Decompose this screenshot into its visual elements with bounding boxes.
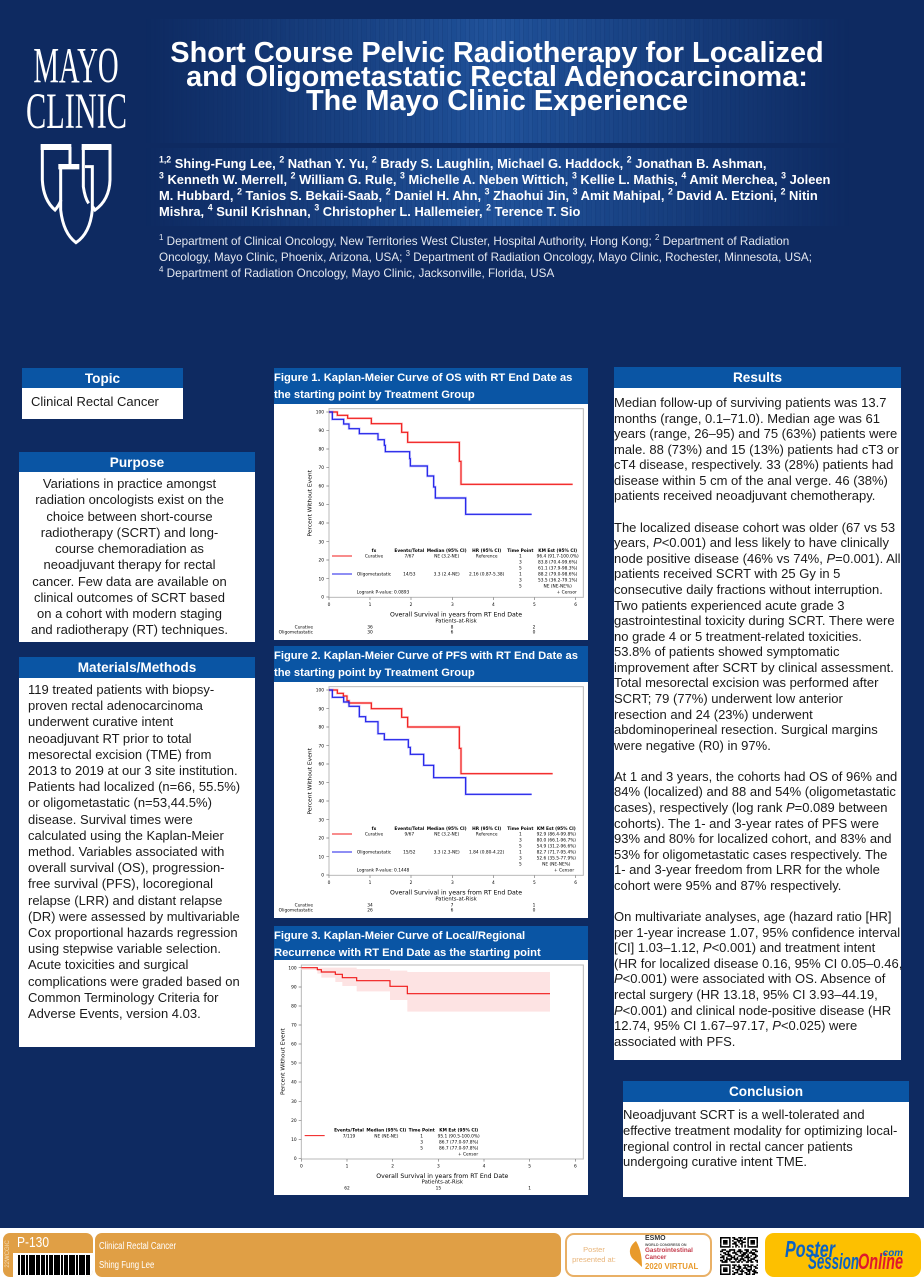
chart: figure 1 overall survival: 61.1 (37.9-98.3%) bbox=[538, 566, 578, 572]
chart: figure 2 progression-free survival: KM Est (95% CI) bbox=[537, 826, 576, 832]
author background band bbox=[198, 148, 793, 226]
chart: figure 2 progression-free survival: 40 bbox=[318, 799, 324, 805]
chart: figure 3 local regional recurrence: 95.1 (90.5-100.0%) bbox=[438, 1133, 480, 1139]
chart: figure 1 overall survival: Overall Survival in years from RT End Date bbox=[390, 612, 522, 619]
panel: materials and methods: Patients had localized (n=66, 55.5%) bbox=[28, 779, 240, 794]
panel: materials and methods: using stepwise variable selection. bbox=[28, 941, 221, 956]
chart: figure 2 progression-free survival: 82.7 (71.7-95.4%) bbox=[537, 850, 576, 856]
chart: figure 2 progression-free survival: 60 bbox=[318, 762, 324, 768]
chart: figure 2 progression-free survival: 100 bbox=[316, 688, 324, 694]
poster number and barcode: P-130 bbox=[17, 1234, 49, 1251]
panel: results: 84% (localized) and 88 and 54% (oligometastatic bbox=[614, 784, 896, 799]
panel: materials and methods: proven rectal adenocarcinoma bbox=[28, 698, 203, 713]
panel: materials and methods bbox=[19, 657, 255, 1047]
chart: figure 3 local regional recurrence: 86.7 (77.0-97.8%) bbox=[439, 1140, 479, 1146]
chart: figure 1 overall survival: Curative bbox=[365, 554, 383, 560]
chart: figure 1 overall survival: 1 bbox=[369, 602, 372, 608]
chart: figure 1 overall survival: 96.4 (91.7-100.0%) bbox=[537, 554, 579, 560]
affiliations: Oncology, Mayo Clinic, Phoenix, Arizona, USA; 3 Department of Radiation Oncology, Mayo Clinic, Rochester, Minnesota, USA; bbox=[159, 249, 812, 264]
panel: materials and methods: Adverse Events, version 4.03. bbox=[28, 1006, 201, 1021]
affiliations: 4 Department of Radiation Oncology, Mayo Clinic, Jacksonville, Florida, USA bbox=[159, 265, 554, 280]
panel: results: Results bbox=[733, 370, 782, 385]
chart: figure 1 overall survival: KM Est (95% CI) bbox=[538, 548, 577, 554]
chart: figure 3 local regional recurrence: 10 bbox=[291, 1137, 297, 1143]
panel: topic: Topic bbox=[85, 371, 120, 386]
header background band bbox=[198, 19, 793, 143]
chart: figure 1 overall survival: 6 bbox=[574, 602, 577, 608]
panel: results: 93% and 80% for localized cohort, and 83% and bbox=[614, 831, 892, 846]
chart: figure 3 local regional recurrence: 1 bbox=[528, 1186, 531, 1192]
chart: figure 2 progression-free survival: 7 bbox=[451, 902, 454, 908]
chart: figure 2 progression-free survival: 0 bbox=[533, 908, 536, 914]
panel: results: patients received neoadjuvant chemotherapy. bbox=[614, 488, 875, 503]
logo: PosterSessionOnline: Poster bbox=[785, 1236, 836, 1262]
chart: figure 2 progression-free survival: Median (95% CI) bbox=[427, 826, 467, 832]
panel: results: consecutive daily fractions without interruption. bbox=[614, 582, 883, 597]
authors: 3 Kenneth W. Merrell, 2 William G. Rule, 3 Michelle A. Neben Wittich, 3 Kellie L. Mathis, 4 Amit Merchea, 3 Joleen bbox=[159, 171, 830, 187]
session and author strip: Shing Fung Lee bbox=[99, 1260, 154, 1271]
chart: figure 1 overall survival: Logrank P-value: 0.0893 bbox=[357, 590, 409, 596]
chart: figure 1 overall survival: 80 bbox=[318, 447, 324, 453]
chart: figure 1 overall survival: 20 bbox=[318, 558, 324, 564]
chart: figure 2 progression-free survival: 30 bbox=[318, 817, 324, 823]
chart: figure 1 overall survival: 2 bbox=[410, 602, 413, 608]
chart: figure 1 overall survival: 3 bbox=[519, 578, 522, 584]
panel: results: P<0.001) were associated with OS. Absence of bbox=[614, 971, 885, 986]
chart: figure 3 local regional recurrence: 4 bbox=[483, 1164, 486, 1170]
chart: figure 2 progression-free survival: 4 bbox=[492, 880, 495, 886]
panel: results: years, P<0.001) and less likely to have clinically bbox=[614, 535, 889, 550]
chart: figure 1 overall survival: 3.3 (2.4-NE) bbox=[434, 572, 460, 578]
panel: results: cT4 disease, respectively. 33 (28%) patients had bbox=[614, 457, 893, 472]
chart: figure 3 local regional recurrence: 6 bbox=[574, 1164, 577, 1170]
panel: results: rectal surgery (HR 13.18, 95% CI 3.93–44.19, bbox=[614, 987, 878, 1002]
panel: materials and methods: neoadjuvant RT prior to total bbox=[28, 731, 192, 746]
figure 1 heading: Figure 1. Kaplan-Meier Curve of OS with RT End Date as bbox=[274, 372, 572, 384]
chart: figure 2 progression-free survival: Reference bbox=[476, 832, 498, 838]
panel: results: 1- and 3-year freedom from LRR for the whole bbox=[614, 862, 880, 877]
panel: materials and methods: method. Variables associated with bbox=[28, 844, 224, 859]
chart: figure 1 overall survival: 1 bbox=[519, 572, 522, 578]
logo: PosterSessionOnline bbox=[765, 1233, 921, 1277]
chart: figure 3 local regional recurrence: 60 bbox=[291, 1042, 297, 1048]
figure 3 heading: Figure 3. Kaplan-Meier Curve of Local/Regional bbox=[274, 930, 525, 942]
chart: figure 2 progression-free survival: Curative bbox=[365, 832, 383, 838]
authors: 1,2 Shing-Fung Lee, 2 Nathan Y. Yu, 2 Brady S. Laughlin, Michael G. Haddock, 2 Jonathan B. Ashman, bbox=[159, 155, 767, 171]
affiliations bbox=[159, 233, 812, 280]
chart: figure 3 local regional recurrence: Time Point bbox=[409, 1128, 435, 1134]
panel: results: The localized disease cohort was older (67 vs 53 bbox=[614, 520, 895, 535]
chart: figure 1 overall survival: Oligometastatic bbox=[357, 572, 392, 578]
chart: figure 2 progression-free survival: fx bbox=[372, 826, 377, 832]
chart: figure 2 progression-free survival: 90 bbox=[318, 706, 324, 712]
chart: figure 3 local regional recurrence: 100 bbox=[288, 965, 297, 971]
chart: figure 2 progression-free survival: 20 bbox=[318, 836, 324, 842]
panel: purpose: Variations in practice amongst bbox=[43, 476, 216, 491]
authors: Mishra, 4 Sunil Krishnan, 3 Christopher L. Hallemeier, 2 Terence T. Sio bbox=[159, 203, 580, 219]
chart: figure 2 progression-free survival: 52.6 (35.5-77.9%) bbox=[537, 856, 576, 862]
chart: figure 3 local regional recurrence: Overall Survival in years from RT End Date bbox=[376, 1173, 509, 1180]
congress badge: ESMO bbox=[645, 1235, 666, 1242]
panel: materials and methods: (DR) were assessed by multivariable bbox=[28, 909, 240, 924]
chart: figure 1 overall survival: 8 bbox=[451, 624, 454, 630]
panel: results: cohorts). The 1- and 3-year rates of PFS were bbox=[614, 816, 879, 831]
chart: figure 1 overall survival: fx bbox=[372, 548, 377, 554]
panel: results: Total mesorectal excision was performed after bbox=[614, 675, 878, 690]
figure 3 heading bbox=[274, 926, 588, 960]
chart: figure 1 overall survival: 60 bbox=[318, 484, 324, 490]
chart: figure 2 progression-free survival: 0 bbox=[321, 873, 324, 879]
panel: conclusion: Conclusion bbox=[729, 1084, 803, 1099]
poster number and barcode: 22WCGIC bbox=[5, 1240, 11, 1268]
chart: figure 2 progression-free survival: Patients-at-Risk bbox=[435, 896, 478, 902]
chart: figure 1 overall survival: Reference bbox=[476, 554, 498, 560]
chart: figure 2 progression-free survival: 1 bbox=[533, 902, 536, 908]
logo: Mayo Clinic bbox=[26, 38, 127, 244]
chart: figure 3 local regional recurrence: 0 bbox=[300, 1164, 303, 1170]
chart: figure 1 overall survival bbox=[278, 408, 584, 636]
figure 1 heading: the starting point by Treatment Group bbox=[274, 389, 475, 401]
chart: figure 1 overall survival: 5 bbox=[519, 566, 522, 572]
chart: figure 3 local regional recurrence: 5 bbox=[528, 1164, 531, 1170]
chart: figure 2 progression-free survival: Events/Total bbox=[394, 826, 425, 832]
panel: results: node positive disease (46% vs 74%, P=0.001). All bbox=[614, 551, 901, 566]
congress badge: Poster bbox=[583, 1245, 605, 1254]
panel: results: [CI] 1.03–1.12, P<0.001) and treatment intent bbox=[614, 940, 875, 955]
chart: figure 3 local regional recurrence: 30 bbox=[291, 1099, 297, 1105]
figure 3 heading: Recurrence with RT End Date as the starting point bbox=[274, 947, 541, 959]
panel: conclusion: undergoing curative intent TME. bbox=[623, 1154, 807, 1169]
panel: results: months (range, 0.1–71.0). Median age was 61 bbox=[614, 411, 880, 426]
panel: materials and methods: Cox proportional hazards regression bbox=[28, 925, 238, 940]
panel: materials and methods: Acute toxicities and surgical bbox=[28, 957, 188, 972]
panel: conclusion: Neoadjuvant SCRT is a well-tolerated and bbox=[623, 1107, 865, 1122]
panel: materials and methods: Materials/Methods bbox=[78, 660, 196, 675]
chart: figure 1 overall survival: Percent Without Event bbox=[308, 470, 314, 537]
figure 2 heading: Figure 2. Kaplan-Meier Curve of PFS with RT End Date as bbox=[274, 650, 578, 662]
chart: figure 1 overall survival: Patients-at-Risk bbox=[435, 618, 478, 624]
chart: figure 2 progression-free survival: Oligometastatic bbox=[279, 908, 314, 914]
chart: figure 2 progression-free survival: 6 bbox=[574, 880, 577, 886]
panel: results: abdominoperineal resection. Surgical margins bbox=[614, 722, 878, 737]
chart: figure 1 overall survival: 36 bbox=[367, 624, 373, 630]
congress badge: presented at: bbox=[572, 1254, 616, 1264]
panel: materials and methods: 2013 to 2019 at our 3 site institution. bbox=[28, 763, 238, 778]
panel: results: cohort were 95% and 87% respectively. bbox=[614, 878, 841, 893]
chart: figure 1 overall survival: 2.16 (0.87-5.38) bbox=[469, 572, 505, 578]
congress badge: Cancer bbox=[645, 1254, 666, 1260]
chart: figure 1 overall survival: NE (3.2-NE) bbox=[434, 554, 460, 560]
panel: purpose: Purpose bbox=[110, 455, 164, 470]
chart: figure 1 overall survival: 6 bbox=[451, 630, 454, 636]
panel: materials and methods: disease. Survival times were bbox=[28, 812, 193, 827]
chart: figure 1 overall survival: 70 bbox=[318, 465, 324, 471]
panel: materials and methods: complications were graded based on bbox=[28, 974, 240, 989]
chart: figure 2 progression-free survival: Oligometastatic bbox=[357, 850, 392, 856]
chart: figure 3 local regional recurrence: + Censor bbox=[458, 1152, 478, 1158]
chart: figure 1 overall survival: 5 bbox=[519, 584, 522, 590]
chart: figure 2 progression-free survival: 10 bbox=[318, 854, 324, 860]
panel: purpose: choice between short-course bbox=[46, 508, 213, 524]
chart: figure 2 progression-free survival: Percent Without Event bbox=[308, 748, 314, 815]
chart: figure 3 local regional recurrence: 62 bbox=[344, 1186, 350, 1192]
panel: materials and methods: Common Terminology Criteria for bbox=[28, 990, 218, 1005]
chart: figure 2 progression-free survival: 9/67 bbox=[404, 832, 414, 838]
panel: purpose: course chemoradiation as bbox=[55, 541, 204, 556]
panel: results: P<0.001) and clinical node-positive disease (HR bbox=[614, 1003, 891, 1018]
chart: figure 1 overall survival: 90 bbox=[318, 428, 324, 434]
chart: figure 3 local regional recurrence: 3 bbox=[437, 1164, 440, 1170]
chart: figure 1 overall survival: 3 bbox=[451, 602, 454, 608]
panel: materials and methods: underwent curative intent bbox=[28, 714, 173, 729]
title: The Mayo Clinic Experience bbox=[306, 85, 688, 117]
chart: figure 3 local regional recurrence: 2 bbox=[391, 1164, 394, 1170]
chart: figure 1 overall survival: 88.2 (79.0-98.6%) bbox=[538, 572, 578, 578]
chart: figure 2 progression-free survival: 3.3 (2.3-NE) bbox=[434, 850, 460, 856]
chart: figure 1 overall survival: 10 bbox=[318, 576, 324, 582]
chart: figure 1 overall survival: 100 bbox=[316, 410, 324, 416]
figure 2 heading: the starting point by Treatment Group bbox=[274, 667, 475, 679]
chart: figure 2 progression-free survival: Overall Survival in years from RT End Date bbox=[390, 890, 522, 897]
panel: conclusion: effective treatment modality for optimizing local- bbox=[623, 1123, 897, 1138]
chart: figure 2 progression-free survival: 1 bbox=[519, 850, 522, 856]
panel: results: years (range, 26–95) and 75 (63%) patients were bbox=[614, 426, 897, 441]
panel: results: disease within 5 cm of the anal verge. 46 (38%) bbox=[614, 473, 888, 488]
chart: figure 2 progression-free survival: 26 bbox=[367, 908, 373, 914]
panel: materials and methods: 119 treated patients with biopsy- bbox=[28, 682, 214, 697]
chart: figure 1 overall survival: 5 bbox=[533, 602, 536, 608]
chart: figure 1 overall survival: NE (NE-NE%) bbox=[543, 584, 572, 590]
panel: purpose: clinical outcomes of SCRT based bbox=[34, 590, 225, 605]
chart: figure 2 progression-free survival: Logrank P-value: 0.1448 bbox=[357, 868, 409, 874]
chart: figure 2 progression-free survival: HR (95% CI) bbox=[472, 826, 501, 832]
chart: figure 2 progression-free survival: 92.9 (86.4-99.8%) bbox=[537, 832, 576, 838]
chart: figure 3 local regional recurrence: 0 bbox=[294, 1156, 297, 1162]
panel: results: 53% for oligometastatic cases respectively. The bbox=[614, 847, 887, 862]
chart: figure 2 progression-free survival: 54.9 (31.2-96.6%) bbox=[537, 844, 576, 850]
panel: topic bbox=[22, 368, 183, 419]
chart: figure 1 overall survival: 30 bbox=[367, 630, 373, 636]
panel: results: no grade 4 or 5 treatment-related toxicities. bbox=[614, 629, 862, 644]
chart: figure 1 overall survival: 3 bbox=[519, 560, 522, 566]
chart: figure 3 local regional recurrence: 5 bbox=[420, 1146, 423, 1152]
chart: figure 1 overall survival: 2 bbox=[533, 624, 536, 630]
affiliations: 1 Department of Clinical Oncology, New Territories West Cluster, Hospital Authority, Hong Kong; 2 Department of Radiation bbox=[159, 233, 789, 248]
congress badge: Gastrointestinal bbox=[645, 1247, 693, 1254]
panel: results: resection and 24 (23%) underwent bbox=[614, 707, 813, 722]
panel: materials and methods: or oligometastatic (n=53,44.5%) bbox=[28, 795, 212, 810]
panel: materials and methods: relapse (LRR) and distant relapse bbox=[28, 893, 222, 908]
chart: figure 3 local regional recurrence: NE (NE-NE) bbox=[374, 1133, 399, 1139]
icon: wheat bbox=[630, 1241, 642, 1267]
chart: figure 2 progression-free survival: 5 bbox=[519, 862, 522, 868]
chart: figure 1 overall survival: 53.5 (36.2-79.1%) bbox=[538, 578, 578, 584]
chart: figure 2 progression-free survival: 3 bbox=[451, 880, 454, 886]
poster number and barcode bbox=[3, 1233, 93, 1277]
panel: purpose: radiotherapy (SCRT) and long- bbox=[41, 525, 218, 540]
chart: figure 3 local regional recurrence: 40 bbox=[291, 1080, 297, 1086]
footer bar bbox=[0, 1228, 924, 1280]
chart: figure 3 local regional recurrence: 7/119 bbox=[343, 1133, 355, 1139]
chart: figure 2 progression-free survival: + Censor bbox=[554, 868, 574, 874]
panel: purpose: and radiotherapy (RT) techniques. bbox=[31, 622, 228, 637]
congress badge bbox=[565, 1233, 712, 1277]
chart: figure 2 progression-free survival: 3 bbox=[519, 838, 522, 844]
chart: figure 1 overall survival: + Censor bbox=[557, 590, 577, 596]
chart: figure 1 overall survival: 30 bbox=[318, 539, 324, 545]
chart: figure 1 overall survival: Curative bbox=[295, 624, 313, 630]
chart: figure 2 progression-free survival: Curative bbox=[295, 902, 313, 908]
chart: figure 2 progression-free survival: 5 bbox=[533, 880, 536, 886]
chart: figure 1 overall survival: 0 bbox=[328, 602, 331, 608]
chart: figure 2 progression-free survival: NE (NE-NE%) bbox=[542, 862, 571, 868]
chart: figure 3 local regional recurrence bbox=[280, 964, 584, 1192]
chart: figure 2 progression-free survival: 80 bbox=[318, 725, 324, 731]
chart: figure 2 progression-free survival: 15/52 bbox=[403, 850, 416, 856]
chart: figure 3 local regional recurrence: 20 bbox=[291, 1118, 297, 1124]
chart: figure 3 local regional recurrence: 3 bbox=[420, 1140, 423, 1146]
panel: results: Median follow-up of surviving patients was 13.7 bbox=[614, 395, 886, 410]
panel: materials and methods: free survival (PFS), locoregional bbox=[28, 876, 213, 891]
congress badge: 2020 VIRTUAL bbox=[645, 1262, 698, 1271]
panel: results: Two patients experienced acute grade 3 bbox=[614, 598, 845, 613]
chart: figure 1 overall survival: 50 bbox=[318, 502, 324, 508]
panel: conclusion bbox=[623, 1081, 909, 1197]
chart: figure 2 progression-free survival: Time Point bbox=[507, 826, 533, 832]
chart: figure 1 overall survival: Median (95% CI) bbox=[427, 548, 467, 554]
chart: figure 1 overall survival: Time Point bbox=[507, 548, 533, 554]
panel: results: associated with PFS. bbox=[614, 1034, 735, 1049]
chart: figure 2 progression-free survival: 5 bbox=[519, 844, 522, 850]
chart: figure 2 progression-free survival: 2 bbox=[410, 880, 413, 886]
chart: figure 3 local regional recurrence: Events/Total bbox=[334, 1128, 364, 1134]
panel: conclusion: regional control in rectal cancer patients bbox=[623, 1139, 853, 1154]
figure 1 heading bbox=[274, 368, 588, 404]
chart: figure 2 progression-free survival: 3 bbox=[519, 856, 522, 862]
chart: figure 3 local regional recurrence: Percent Without Event bbox=[280, 1028, 286, 1095]
chart: figure 2 progression-free survival: 70 bbox=[318, 743, 324, 749]
panel: results: male. 88 (73%) and 15 (13%) patients had cT3 or bbox=[614, 442, 899, 457]
chart: figure 1 overall survival: HR (95% CI) bbox=[472, 548, 501, 554]
figure 3 background bbox=[274, 960, 588, 1195]
chart: figure 2 progression-free survival: 50 bbox=[318, 780, 324, 786]
panel: results: cases), respectively (log rank P=0.089 between bbox=[614, 800, 888, 815]
session and author strip bbox=[95, 1233, 561, 1277]
chart: figure 3 local regional recurrence: Patients-at-Risk bbox=[422, 1180, 464, 1186]
chart: figure 3 local regional recurrence: 86.7 (77.0-97.8%) bbox=[439, 1146, 479, 1152]
logo: PosterSessionOnline: Session bbox=[808, 1249, 859, 1274]
panel: purpose: radiation oncologists exist on the bbox=[35, 492, 224, 507]
panel: results: were negative (R0) in 97%. bbox=[614, 738, 771, 753]
chart: figure 2 progression-free survival: 80.0 (66.1-96.7%) bbox=[537, 838, 576, 844]
panel: results bbox=[614, 367, 902, 1060]
panel: results: per 1-year increase 1.07, 95% confidence interval bbox=[614, 925, 900, 940]
chart: figure 2 progression-free survival: 1 bbox=[519, 832, 522, 838]
panel: results: gastrointestinal toxicity during SCRT. There were bbox=[614, 613, 895, 628]
chart: figure 3 local regional recurrence: KM Est (95% CI) bbox=[439, 1128, 478, 1134]
chart: figure 3 local regional recurrence: 1 bbox=[420, 1133, 423, 1139]
panel: results: (HR for localized disease 0.16, 95% CI 0.05–0.46, bbox=[614, 956, 902, 971]
panel: purpose bbox=[19, 452, 255, 642]
chart: figure 3 local regional recurrence: 50 bbox=[291, 1061, 297, 1067]
panel: topic: Clinical Rectal Cancer bbox=[31, 394, 159, 409]
chart: figure 2 progression-free survival: 0 bbox=[328, 880, 331, 886]
chart: figure 1 overall survival: 0 bbox=[321, 595, 324, 601]
title bbox=[170, 37, 824, 117]
panel: purpose: neoadjuvant therapy for rectal bbox=[44, 557, 216, 572]
panel: results: SCRT; 79 (77%) underwent low anterior bbox=[614, 691, 843, 706]
panel: materials and methods: mesorectal excision (TME) from bbox=[28, 747, 211, 762]
title: and Oligometastatic Rectal Adenocarcinoma: bbox=[186, 61, 808, 93]
chart: figure 2 progression-free survival: 34 bbox=[367, 902, 373, 908]
chart: figure 2 progression-free survival: 6 bbox=[451, 908, 454, 914]
chart: figure 1 overall survival: Oligometastatic bbox=[279, 630, 314, 636]
figure 1 background bbox=[274, 404, 588, 640]
chart: figure 1 overall survival: 0 bbox=[533, 630, 536, 636]
panel: materials and methods: overall survival (OS), progression- bbox=[28, 860, 225, 875]
chart: figure 1 overall survival: 4 bbox=[492, 602, 495, 608]
figure 2 heading bbox=[274, 646, 588, 682]
chart: figure 1 overall survival: 14/53 bbox=[403, 572, 416, 578]
panel: results: At 1 and 3 years, the cohorts had OS of 96% and bbox=[614, 769, 897, 784]
panel: results: 12.74, 95% CI 1.67–97.17, P<0.025) were bbox=[614, 1018, 857, 1033]
authors bbox=[159, 155, 830, 219]
chart: figure 3 local regional recurrence: 80 bbox=[291, 1004, 297, 1010]
chart: figure 1 overall survival: 1 bbox=[519, 554, 522, 560]
chart: figure 2 progression-free survival: 1 bbox=[369, 880, 372, 886]
panel: purpose: cancer. Few data are available on bbox=[32, 574, 227, 588]
chart: figure 3 local regional recurrence: 90 bbox=[291, 985, 297, 991]
panel: results: On multivariate analyses, age (hazard ratio [HR] bbox=[614, 909, 891, 924]
congress badge: WORLD CONGRESS ON bbox=[645, 1243, 687, 1247]
panel: materials and methods: calculated using the Kaplan-Meier bbox=[28, 828, 224, 843]
logo: PosterSessionOnline: .com bbox=[880, 1248, 903, 1259]
panel: results: improvement after SCRT by clinical assessment. bbox=[614, 660, 894, 675]
chart: figure 3 local regional recurrence: 1 bbox=[346, 1164, 349, 1170]
chart: figure 3 local regional recurrence: Median (95% CI) bbox=[366, 1128, 406, 1134]
chart: figure 1 overall survival: 83.8 (70.4-99.6%) bbox=[538, 560, 578, 566]
chart: figure 2 progression-free survival: NE (3.2-NE) bbox=[434, 832, 460, 838]
chart: figure 1 overall survival: Events/Total bbox=[394, 548, 425, 554]
chart: figure 1 overall survival: 7/67 bbox=[404, 554, 414, 560]
authors: M. Hubbard, 2 Tanios S. Bekaii-Saab, 2 Daniel H. Ahn, 3 Zhaohui Jin, 3 Amit Mahipal, 2 David A. Etzioni, 2 Nitin bbox=[159, 187, 818, 203]
chart: figure 3 local regional recurrence: 70 bbox=[291, 1023, 297, 1029]
chart: figure 2 progression-free survival: 1.84 (0.80-4.22) bbox=[469, 850, 505, 856]
QR code bbox=[720, 1237, 758, 1275]
chart: figure 2 progression-free survival bbox=[278, 686, 584, 914]
chart: figure 1 overall survival: 40 bbox=[318, 521, 324, 527]
panel: purpose: on a cohort with modern staging bbox=[37, 606, 222, 621]
chart: figure 3 local regional recurrence: 15 bbox=[436, 1186, 441, 1192]
panel: results: 53.8% of patients showed symptomatic bbox=[614, 644, 839, 659]
figure 2 background bbox=[274, 682, 588, 918]
title: Short Course Pelvic Radiotherapy for Localized bbox=[170, 37, 824, 69]
session and author strip: Clinical Rectal Cancer bbox=[99, 1241, 176, 1252]
panel: results: patients received SCRT with 25 Gy in 5 bbox=[614, 566, 840, 581]
